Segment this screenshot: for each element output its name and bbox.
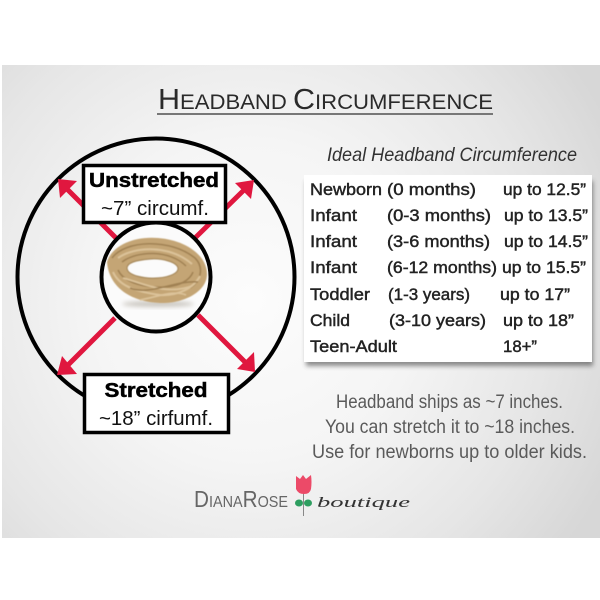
table rows: Toddler (310, 285, 370, 304)
table rows: Infant (310, 206, 357, 225)
box: stretched: ~18” cirfumf. (99, 408, 213, 430)
arrow: lower right (198, 315, 255, 372)
table rows: (6-12 months) (387, 258, 497, 277)
background panel (2, 65, 600, 538)
title: HEADBAND CIRCUMFERENCE (158, 84, 493, 116)
table rows: Child (310, 311, 350, 330)
icon: coiled headband (107, 238, 207, 307)
table rows: Newborn (310, 180, 382, 199)
description text (312, 392, 587, 463)
table rows: Infant (310, 258, 357, 277)
outer circle (18, 138, 294, 416)
table rows: Teen-Adult (310, 337, 397, 356)
table rows: (3-6 months) (387, 232, 490, 251)
table heading: Ideal Headband Circumference (327, 145, 577, 166)
inner circle (102, 222, 210, 332)
arrow: upper right (195, 180, 254, 238)
arrow: lower left (57, 318, 115, 375)
box: unstretched: ~7” circumf. (101, 198, 209, 220)
icon: rose (295, 475, 312, 516)
description text: Use for newborns up to older kids. (312, 442, 587, 463)
table rows: Infant (310, 232, 357, 251)
box: stretched: Stretched (104, 380, 208, 402)
table rows (310, 180, 588, 356)
description text: Headband ships as ~7 inches. (336, 392, 563, 413)
box: stretched (84, 374, 228, 432)
table rows: (0-3 months) (387, 206, 491, 225)
logo wordmark: DIANAROSE (194, 486, 288, 512)
table rows: up to 15.5” (502, 258, 586, 277)
diagram: headband stretch circles (18, 138, 294, 432)
table rows: (1-3 years) (388, 285, 470, 304)
arrow: upper left (58, 179, 116, 238)
logo: Diana Rose boutique (194, 475, 411, 516)
box: unstretched (84, 166, 226, 222)
table rows: (0 months) (387, 180, 476, 199)
table rows: (3-10 years) (389, 311, 486, 330)
logo script: boutique (317, 495, 411, 511)
table rows: 18+” (503, 337, 537, 356)
table rows: up to 12.5” (503, 180, 586, 199)
table rows: up to 18” (503, 311, 574, 330)
table rows: up to 17” (500, 285, 570, 304)
table rows: up to 14.5” (504, 232, 588, 251)
description text: You can stretch it to ~18 inches. (325, 417, 575, 438)
table rows: up to 13.5” (504, 206, 588, 225)
box: unstretched: Unstretched (89, 170, 219, 192)
size table (304, 175, 593, 366)
